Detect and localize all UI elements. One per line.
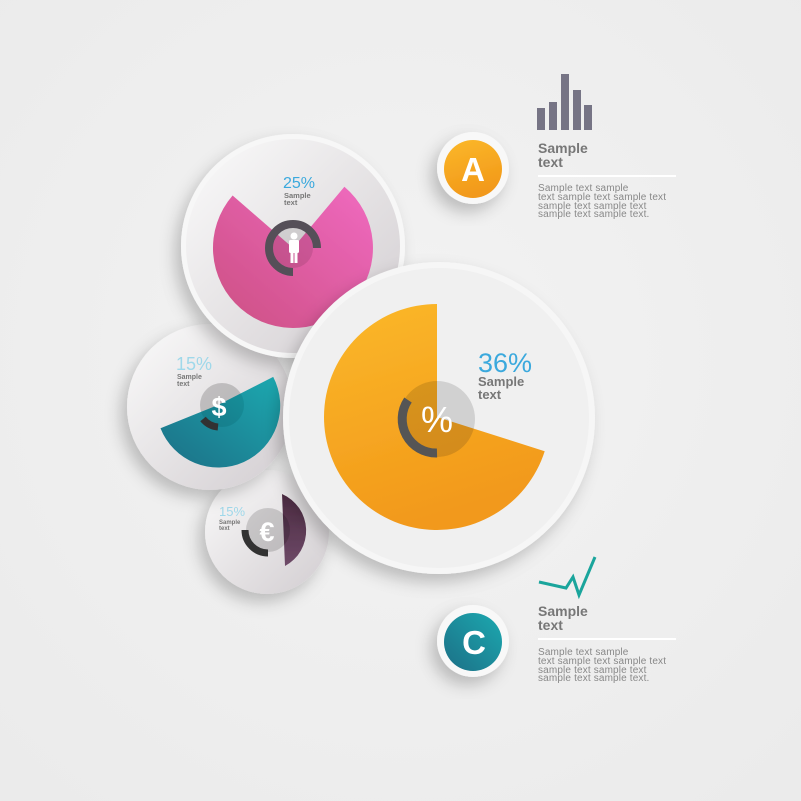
teal sector: [160, 377, 280, 468]
icon: percent: %: [421, 399, 453, 440]
label: 15% euro: 15%: [219, 504, 245, 519]
text block A: [538, 140, 676, 220]
panel: orange circle: [283, 262, 595, 574]
label: 15% euro: Sample: [219, 520, 241, 526]
icon: badge A: A: [461, 151, 485, 188]
label: 15%: 15%: [176, 354, 212, 374]
text block C: text sample text sample text: [538, 656, 666, 667]
label: 15% euro: text: [219, 526, 230, 532]
icon: badge C: [437, 605, 509, 677]
text block A: Sample: [538, 140, 588, 156]
text block A: sample text sample text.: [538, 209, 649, 220]
text block C: Sample text sample: [538, 647, 629, 658]
label: 25%: [283, 175, 315, 207]
text block A: text sample text sample text: [538, 192, 666, 203]
label: 36%: 36%: [478, 348, 532, 378]
label: 36%: Sample: [478, 374, 524, 389]
label: 15%: [176, 354, 212, 388]
euro sector: [282, 494, 306, 566]
label: 25%: Sample: [284, 191, 311, 200]
text block C: sample text sample text.: [538, 673, 649, 684]
icon: euro: €: [259, 517, 275, 547]
text block A: sample text sample text: [538, 201, 647, 212]
icon: zigzag line: [539, 557, 595, 595]
label: 15%: text: [177, 381, 190, 388]
icon: badge C: C: [462, 624, 486, 661]
label: 25%: text: [284, 198, 298, 207]
panel: euro circle: [205, 470, 329, 594]
label: 25%: 25%: [283, 175, 315, 192]
text block C: [538, 603, 676, 684]
label: 36%: [478, 348, 532, 402]
text block C: sample text sample text: [538, 665, 647, 676]
label: 15% euro: [219, 504, 245, 532]
label: 15%: Sample: [177, 374, 202, 381]
icon: bar chart: [537, 74, 592, 130]
panel: pink circle: [181, 134, 405, 358]
label: 36%: text: [478, 387, 502, 402]
text block C: text: [538, 617, 563, 633]
text block A: text: [538, 154, 563, 170]
text block A: Sample text sample: [538, 183, 629, 194]
icon: dollar: $: [211, 392, 227, 422]
orange sector: [324, 304, 545, 530]
text block C: Sample: [538, 603, 588, 619]
icon: person: [289, 232, 299, 263]
pink sector: [213, 187, 373, 328]
panel: teal circle: [127, 324, 293, 490]
icon: badge A: [437, 132, 509, 204]
